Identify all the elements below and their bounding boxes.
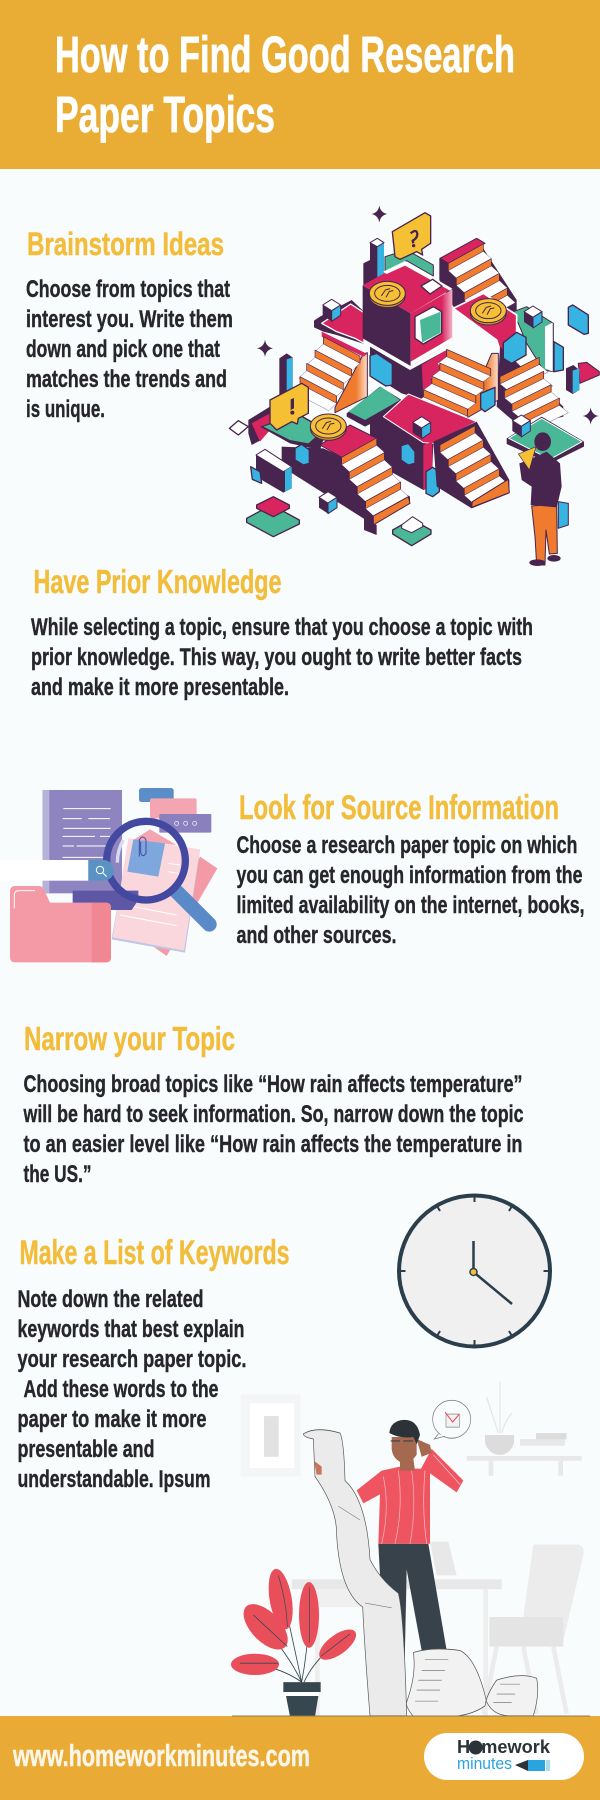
logo: homework minutes: minutes <box>457 1754 512 1773</box>
text block: make a list of keywords: paper to make it more <box>18 1406 206 1433</box>
text block: make a list of keywords: your research paper topic. <box>18 1346 246 1373</box>
title <box>55 26 515 143</box>
speech bubble with envelope <box>433 1400 471 1439</box>
website url: www.homeworkminutes.com <box>12 1738 310 1773</box>
logo: homework minutes <box>424 1733 584 1780</box>
text block: have prior knowledge: and make it more presentable. <box>31 674 289 701</box>
illustration: documents and magnifier <box>0 788 217 962</box>
text block: make a list of keywords: understandable. Ipsum <box>18 1466 210 1493</box>
text block: narrow your topic <box>23 1071 523 1188</box>
text block: narrow your topic: the US.” <box>24 1161 92 1188</box>
text block: look for source information <box>236 832 584 949</box>
text block: make a list of keywords: Add these words to the <box>24 1376 218 1403</box>
text block: make a list of keywords <box>18 1286 246 1493</box>
text block: have prior knowledge <box>31 614 533 701</box>
heading: have prior knowledge: Have Prior Knowledge <box>34 563 282 600</box>
heading: brainstorm ideas: Brainstorm Ideas <box>27 226 224 262</box>
footer bar <box>0 1716 600 1800</box>
logo: homework minutes: Homework <box>457 1737 551 1757</box>
heading: make a list of keywords: Make a List of Keywords <box>20 1234 290 1272</box>
title: Paper Topics <box>55 86 275 143</box>
header banner <box>0 0 600 169</box>
person looking at stairs <box>518 432 568 566</box>
text block: brainstorm ideas: Choose from topics that <box>26 276 230 303</box>
text block: make a list of keywords: presentable and <box>18 1436 154 1463</box>
wall picture <box>241 1394 301 1477</box>
section: have prior knowledge <box>31 563 533 701</box>
potted plant <box>231 1566 360 1717</box>
man in red sweater <box>357 1420 463 1717</box>
section: make a list of keywords <box>18 1234 290 1493</box>
text block: look for source information: and other sources. <box>236 922 396 949</box>
section: brainstorm ideas <box>26 226 233 423</box>
text block: brainstorm ideas: interest you. Write them <box>26 306 233 333</box>
shelf with bowl and books <box>467 1382 582 1476</box>
section: look for source information <box>236 789 584 949</box>
text block: brainstorm ideas: is unique. <box>26 396 105 423</box>
text block: make a list of keywords: Note down the related <box>18 1286 204 1313</box>
icon: wall clock <box>399 1196 550 1346</box>
illustration: isometric stairs and person <box>229 205 599 566</box>
long paper scroll <box>303 1430 538 1717</box>
illustration: man reading long list <box>231 1382 584 1717</box>
background desk and chair <box>292 1542 584 1716</box>
text block: make a list of keywords: keywords that best explain <box>18 1316 244 1343</box>
text block: brainstorm ideas: matches the trends and <box>26 366 227 393</box>
text block: brainstorm ideas: down and pick one that <box>26 336 220 363</box>
text block: brainstorm ideas <box>26 276 233 423</box>
section: narrow your topic <box>23 1020 523 1188</box>
heading: narrow your topic: Narrow your Topic <box>24 1020 235 1057</box>
